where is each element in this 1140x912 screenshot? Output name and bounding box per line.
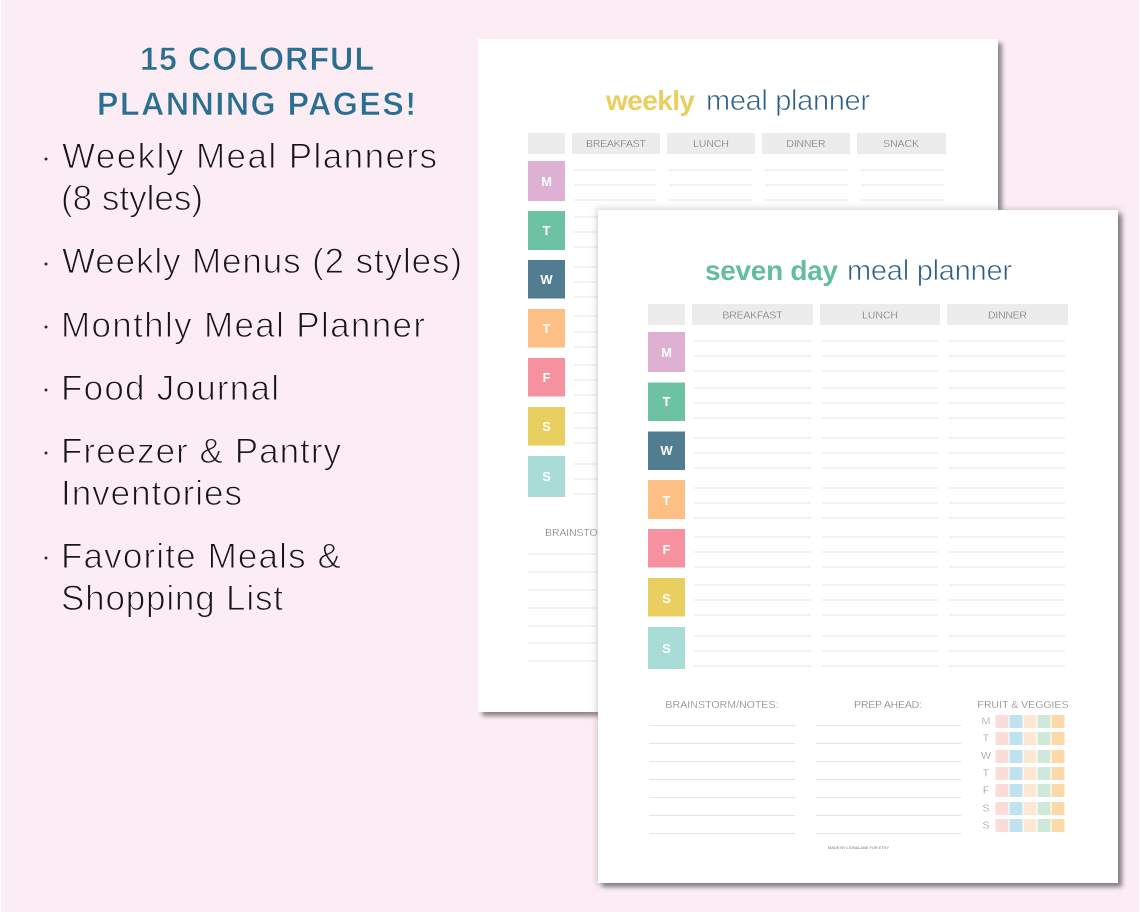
table header: LUNCH <box>693 138 729 150</box>
section: fruit and veggies tracker <box>978 699 1068 832</box>
list item: freezer and pantry inventories: Inventories <box>61 474 242 513</box>
section: fruit and veggies tracker: FRUIT & VEGGIES <box>978 699 1068 711</box>
section: fruit and veggies tracker: S <box>982 802 990 814</box>
title: 15 COLORFUL <box>140 41 374 77</box>
day labels: M <box>541 174 552 189</box>
list item: monthly meal planner: Monthly Meal Planner <box>61 306 425 345</box>
section: brainstorm notes <box>649 699 795 834</box>
list item: weekly menus: Weekly Menus (2 styles) <box>62 242 462 281</box>
writing lines <box>574 170 944 494</box>
section: fruit and veggies tracker: T <box>983 768 990 780</box>
section: prep ahead <box>816 699 961 834</box>
list item: weekly meal planners: Weekly Meal Planners <box>62 137 437 176</box>
table header <box>528 133 946 154</box>
notes heading: BRAINSTORM/NOTES: <box>545 527 655 539</box>
heading: weekly meal planner: weekly <box>605 85 695 116</box>
notes lines <box>528 554 660 661</box>
day labels <box>648 332 685 669</box>
panel: weekly meal planner page <box>478 39 1002 716</box>
day labels: T <box>543 321 551 336</box>
feature list <box>44 137 462 618</box>
section: brainstorm notes: BRAINSTORM/NOTES: <box>666 699 778 711</box>
list item: weekly meal planners: (8 styles) <box>61 179 203 218</box>
section: prep ahead: PREP AHEAD: <box>854 699 922 711</box>
title <box>97 41 416 122</box>
section: fruit and veggies tracker: S <box>982 820 990 832</box>
table header: BREAKFAST <box>722 310 783 322</box>
list item: food journal: Food Journal <box>61 369 279 408</box>
day labels: F <box>543 370 551 385</box>
section: fruit and veggies tracker: T <box>983 732 990 744</box>
day labels: S <box>662 591 671 606</box>
heading: seven day meal planner: seven day <box>705 255 838 286</box>
writing lines <box>694 341 1065 666</box>
day labels: W <box>660 443 673 458</box>
day labels: S <box>542 469 551 484</box>
day labels: M <box>661 345 672 360</box>
day labels: S <box>542 419 551 434</box>
list item: favorite meals and shopping list: Shopping List <box>61 579 283 618</box>
list item: freezer and pantry inventories: Freezer & Pantry <box>61 432 342 471</box>
table header: DINNER <box>988 310 1027 322</box>
table header: LUNCH <box>862 310 898 322</box>
table header <box>648 304 1068 325</box>
section: fruit and veggies tracker: M <box>982 716 990 728</box>
day labels: T <box>543 223 551 238</box>
day labels: F <box>663 542 671 557</box>
day labels <box>528 161 565 497</box>
footer credit: MADE BY LION&LANE FOR ETSY <box>828 845 889 850</box>
list item: favorite meals and shopping list <box>44 537 341 618</box>
title: PLANNING PAGES! <box>97 86 416 122</box>
day labels: T <box>663 493 671 508</box>
day labels: S <box>662 641 671 656</box>
heading: weekly meal planner: meal planner <box>706 85 870 117</box>
heading: seven day meal planner <box>705 255 1012 287</box>
table header: BREAKFAST <box>586 138 647 150</box>
heading: seven day meal planner: meal planner <box>847 255 1012 287</box>
heading: weekly meal planner <box>605 85 870 117</box>
panel: seven day meal planner page <box>596 208 1122 887</box>
list item: favorite meals and shopping list: Favorite Meals & <box>61 537 341 576</box>
section: fruit and veggies tracker: F <box>983 784 989 796</box>
section: fruit and veggies tracker: W <box>981 750 991 762</box>
table header: SNACK <box>883 138 919 150</box>
list item: freezer and pantry inventories <box>44 432 342 513</box>
day labels: W <box>540 272 553 287</box>
list item: weekly meal planners <box>44 137 437 218</box>
table header: DINNER <box>786 138 826 150</box>
day labels: T <box>663 394 671 409</box>
